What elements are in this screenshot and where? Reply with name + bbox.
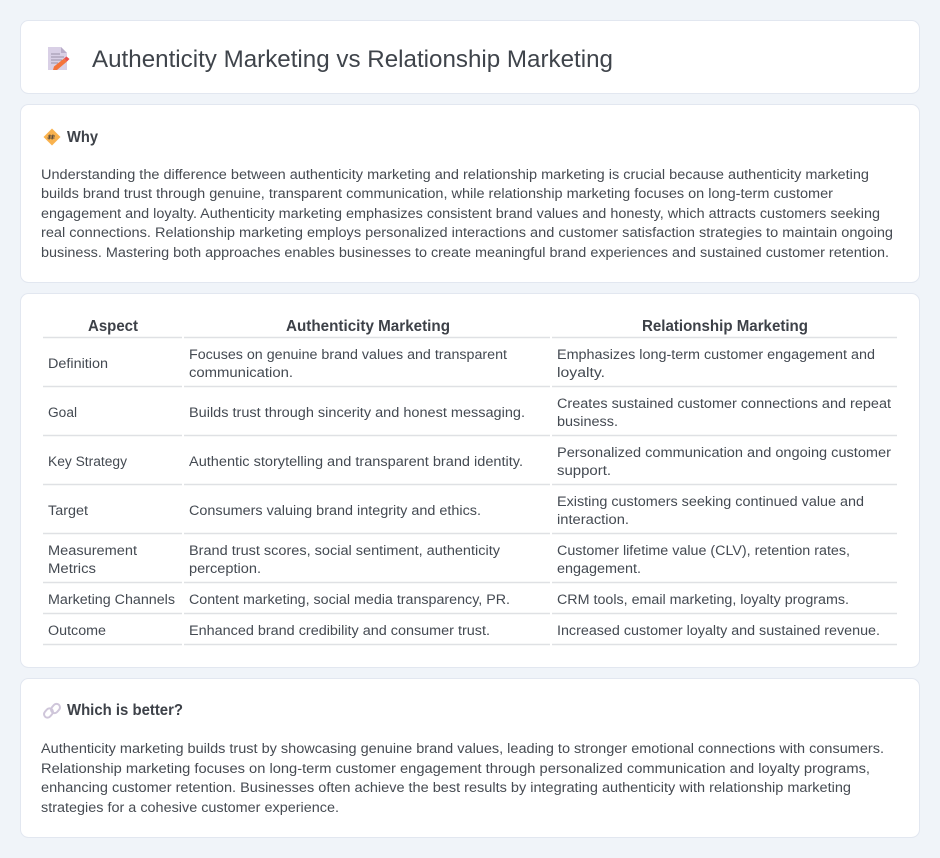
row: outcome: Enhanced brand credibility and consumer trust. (189, 623, 490, 639)
row: goal: Goal (48, 405, 77, 421)
row: key strategy: Personalized communication and ongoing customer (557, 445, 891, 461)
row: definition: Emphasizes long-term customer engagement and (557, 347, 875, 363)
row: definition: Definition (48, 356, 108, 372)
icon: orange diamond sign (44, 128, 60, 146)
text block: why paragraph: builds brand trust through genuine, transparent communication, while relationship marketing focuses on long-term customer (41, 186, 833, 202)
row: goal: Builds trust through sincerity and honest messaging. (189, 405, 525, 421)
table header row: Authenticity Marketing (286, 318, 450, 335)
row: target: Consumers valuing brand integrity and ethics. (189, 503, 481, 519)
text block: why paragraph: real connections. Relationship marketing employs personalized interactions and customer satisfaction strategies to maintain ongoing (41, 225, 893, 241)
row: measurement metrics: Customer lifetime value (CLV), retention rates, (557, 543, 850, 559)
row: measurement metrics: engagement. (557, 561, 641, 577)
text block: why paragraph: engagement and loyalty. Authenticity marketing emphasizes consistent brand values and honesty, which attracts customers seeking (41, 206, 880, 222)
row: marketing channels: Marketing Channels (48, 592, 175, 608)
text block: why paragraph: business. Mastering both approaches enables businesses to create meaningful brand experiences and sustained customer retention. (41, 245, 889, 261)
row: definition: communication. (189, 365, 293, 381)
row: goal: Creates sustained customer connections and repeat (557, 396, 891, 412)
table header row: Aspect (88, 318, 139, 335)
row: key strategy: Authentic storytelling and transparent brand identity. (189, 454, 523, 470)
row: definition (48, 347, 875, 381)
row: outcome: Increased customer loyalty and sustained revenue. (557, 623, 880, 639)
icon: chain link (43, 702, 61, 719)
row: measurement metrics (48, 543, 850, 577)
row: target: interaction. (557, 512, 629, 528)
row: marketing channels: Content marketing, social media transparency, PR. (189, 592, 510, 608)
row: goal: business. (557, 414, 618, 430)
row: measurement metrics: Brand trust scores, social sentiment, authenticity (189, 543, 501, 559)
text block: verdict paragraph: Authenticity marketing builds trust by showcasing genuine brand values, leading to stronger emotional connections with consumers. (41, 741, 884, 757)
panel: comparison table (20, 294, 920, 668)
row: target (48, 494, 864, 528)
row: measurement metrics: perception. (189, 561, 261, 577)
row: key strategy: Key Strategy (48, 454, 128, 470)
row: marketing channels: CRM tools, email marketing, loyalty programs. (557, 592, 849, 608)
text block: why paragraph (41, 167, 893, 261)
heading: which is better: Which is better? (67, 702, 183, 719)
row: key strategy: support. (557, 463, 611, 479)
row: outcome (48, 623, 880, 639)
panel: title header (20, 20, 920, 94)
text block: verdict paragraph (41, 741, 884, 816)
table header row (88, 318, 808, 335)
row: key strategy (48, 445, 891, 479)
row: measurement metrics: Metrics (48, 561, 96, 577)
table header row: Relationship Marketing (642, 318, 808, 335)
panel: which is better (20, 678, 920, 838)
row: definition: Focuses on genuine brand values and transparent (189, 347, 507, 363)
text block: verdict paragraph: enhancing customer retention. Businesses often achieve the best results by integrating authenticity with relationship marketing (41, 780, 851, 796)
text block: why paragraph: Understanding the difference between authenticity marketing and relationship marketing is crucial because authenticity marketing (41, 167, 869, 183)
icon: document with pencil (48, 47, 70, 70)
row: measurement metrics: Measurement (48, 543, 137, 559)
heading: why: Why (67, 129, 98, 146)
row: definition: loyalty. (557, 365, 605, 381)
row: target: Target (48, 503, 88, 519)
title: Authenticity Marketing vs Relationship Marketing (92, 46, 613, 73)
row: marketing channels (48, 592, 849, 608)
text block: verdict paragraph: Relationship marketing focuses on long-term customer engagement through personalized communication and loyalty programs, (41, 761, 870, 777)
row: goal (48, 396, 891, 430)
row: outcome: Outcome (48, 623, 106, 639)
row: target: Existing customers seeking continued value and (557, 494, 864, 510)
text block: verdict paragraph: strategies for a cohesive customer experience. (41, 800, 339, 816)
panel: why (20, 104, 920, 282)
